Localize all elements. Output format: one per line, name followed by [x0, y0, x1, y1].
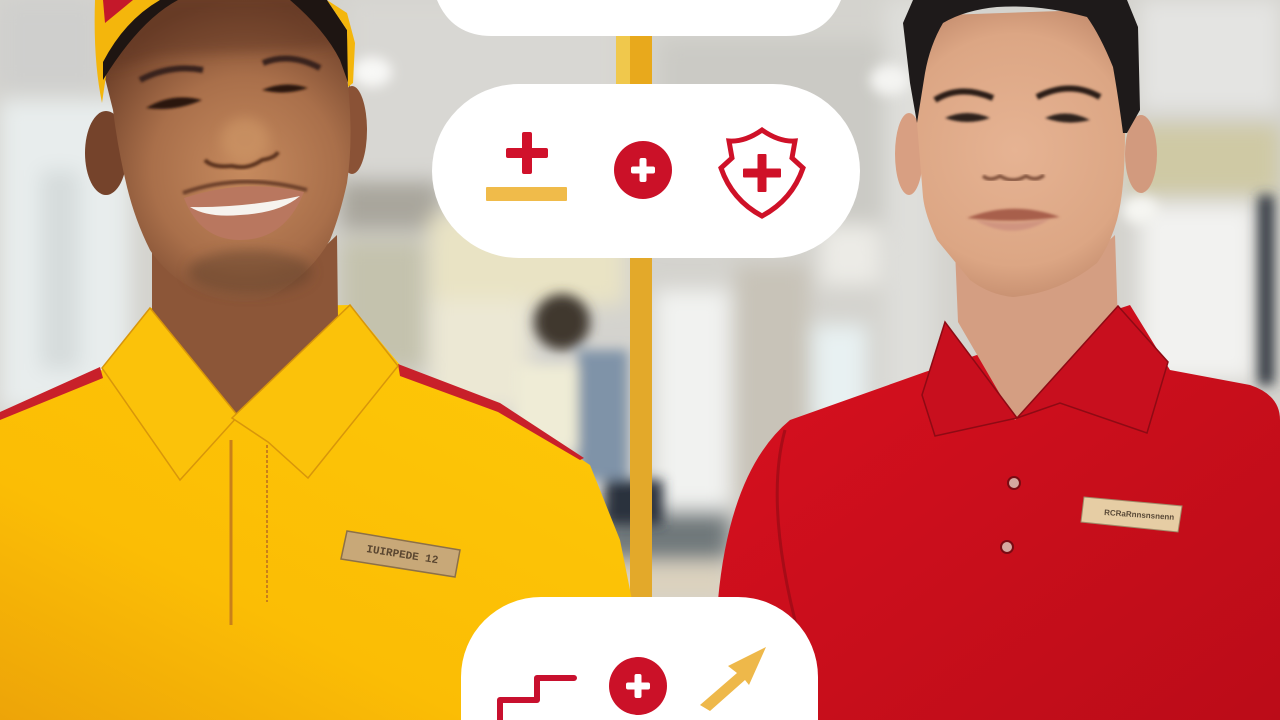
icon: stairs	[500, 678, 574, 720]
collar	[922, 306, 1168, 436]
icon: red circle plus	[614, 141, 672, 199]
neck	[955, 235, 1118, 420]
vertical connector line	[616, 36, 652, 598]
name badge	[1081, 497, 1182, 532]
icon: plus over minus bar	[486, 132, 567, 201]
hair	[903, 0, 1140, 133]
smile	[183, 182, 307, 240]
placket	[231, 440, 267, 625]
name badge	[341, 531, 460, 577]
person: left, yellow uniform	[0, 0, 634, 720]
bottom pill (cropped)	[461, 597, 818, 720]
collar	[102, 305, 398, 480]
ears	[895, 113, 1157, 195]
person: right, red uniform	[718, 0, 1280, 720]
mouth	[967, 209, 1060, 231]
stubble	[188, 250, 312, 294]
red polo shirt	[718, 305, 1280, 720]
upper face shadow	[105, 0, 342, 70]
sleeve shadow	[777, 430, 815, 690]
ears	[85, 86, 367, 195]
middle pill	[432, 84, 860, 258]
nose	[983, 175, 1044, 180]
head	[917, 10, 1125, 297]
icon: shield with plus	[721, 130, 803, 216]
icon: red circle plus	[609, 657, 667, 715]
eyes and brows	[935, 88, 1100, 123]
name badge: IUIRPEDE 12	[365, 544, 439, 567]
red shoulder stripes	[0, 364, 584, 460]
neck	[152, 235, 338, 420]
eyes and brows	[140, 59, 320, 109]
head	[103, 0, 351, 302]
nose	[205, 118, 278, 167]
icon: diagonal arrow	[700, 647, 766, 711]
red and yellow cap	[95, 0, 355, 103]
top pill (cropped)	[437, 0, 841, 36]
buttons	[1001, 477, 1020, 553]
yellow polo shirt	[0, 305, 634, 720]
name badge: RCRaRnnsnsnenn	[1104, 508, 1175, 522]
